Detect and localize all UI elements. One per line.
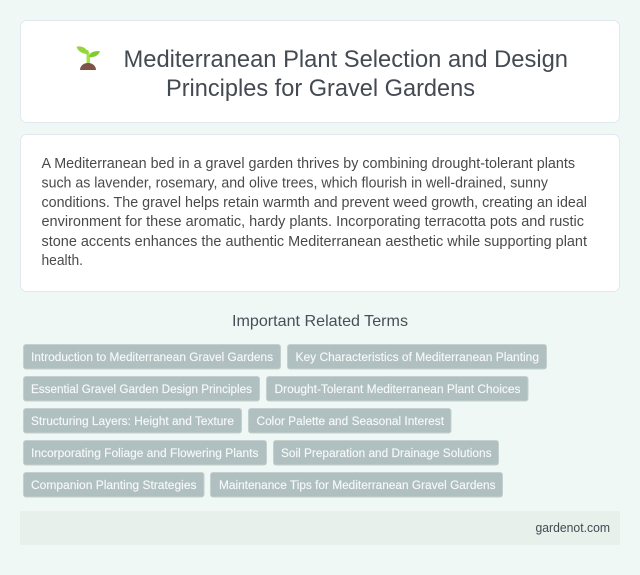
text block: description: stone accents enhances the authentic Mediterranean aesthetic while supporting plant <box>42 234 587 250</box>
tag: key characteristics <box>288 344 546 369</box>
tag: drought-tolerant <box>266 376 528 401</box>
heading: related terms: Important Related Terms <box>232 313 408 330</box>
tag: introduction <box>24 344 280 369</box>
tag: companion planting: Companion Planting Strategies <box>31 478 196 492</box>
tag: introduction: Introduction to Mediterranean Gravel Gardens <box>31 350 273 364</box>
tag: design principles <box>24 376 260 401</box>
panel: title card <box>20 20 620 122</box>
tag: maintenance tips <box>210 472 502 497</box>
footer: gardenot.com <box>536 521 610 535</box>
tag: drought-tolerant: Drought-Tolerant Mediterranean Plant Choices <box>274 382 520 396</box>
panel: description card <box>20 134 620 292</box>
footer <box>20 511 620 545</box>
tag: foliage and flowering <box>24 440 266 465</box>
text block: description <box>42 156 587 269</box>
tag: soil preparation: Soil Preparation and Drainage Solutions <box>281 446 492 460</box>
tag: key characteristics: Key Characteristics of Mediterranean Planting <box>296 350 539 364</box>
tag: design principles: Essential Gravel Garden Design Principles <box>31 382 252 396</box>
text block: description: such as lavender, rosemary, and olive trees, which flourish in well-drained, sunny <box>42 176 549 192</box>
panel: related term tags <box>24 344 546 497</box>
tag: color palette <box>248 408 451 433</box>
heading: title: Mediterranean Plant Selection and Design <box>124 46 568 73</box>
heading: title <box>124 46 568 102</box>
text block: description: A Mediterranean bed in a gravel garden thrives by combining drought-tolerant plants <box>42 156 575 172</box>
tag: foliage and flowering: Incorporating Foliage and Flowering Plants <box>31 446 258 460</box>
tag: soil preparation <box>274 440 498 465</box>
tag: structuring layers <box>24 408 242 433</box>
tag: companion planting <box>24 472 204 497</box>
tag: structuring layers: Structuring Layers: Height and Texture <box>31 414 234 428</box>
tag: maintenance tips: Maintenance Tips for Mediterranean Gravel Gardens <box>219 478 496 492</box>
text block: description: health. <box>42 253 83 269</box>
text block: description: environment for these aromatic, hardy plants. Incorporating terracotta pots and rustic <box>42 214 584 230</box>
text block: description: conditions. The gravel helps retain warmth and prevent weed growth, creating an ideal <box>42 195 587 211</box>
heading: title: Principles for Gravel Gardens <box>166 75 475 102</box>
icon: seedling <box>76 46 100 70</box>
tag: color palette: Color Palette and Seasonal Interest <box>256 414 445 428</box>
